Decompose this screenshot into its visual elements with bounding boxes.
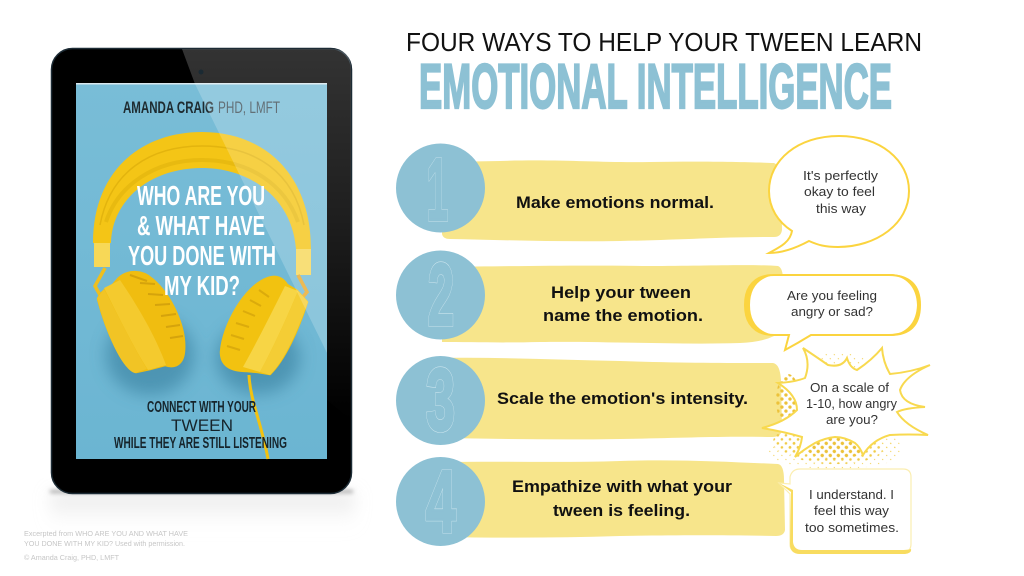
circle number 1 — [396, 144, 485, 232]
numeral 2: 2 — [428, 245, 454, 344]
bubble 4 text — [805, 488, 899, 535]
step text 2: Help your tween — [551, 283, 691, 302]
cable — [249, 375, 268, 459]
burst text: On a scale of — [810, 381, 890, 395]
bubble 1 text: okay to feel — [804, 185, 875, 199]
headband — [93, 132, 311, 249]
credit note: YOU DONE WITH MY KID? Used with permission. — [24, 539, 185, 548]
book subtitle — [114, 399, 287, 452]
numeral 3 — [426, 350, 455, 449]
numeral 3: 3 — [426, 350, 455, 449]
author name: AMANDA CRAIG — [123, 98, 214, 117]
credit note: Excerpted from WHO ARE YOU AND WHAT HAVE — [24, 529, 188, 538]
burst outline — [762, 348, 930, 457]
book title: WHO ARE YOU — [137, 180, 265, 211]
author name: PHD, LMFT — [218, 98, 280, 117]
step text 4: tween is feeling. — [553, 501, 690, 520]
book subtitle: CONNECT WITH YOUR — [147, 399, 256, 416]
halftone dots — [767, 353, 903, 469]
circle number 2 — [396, 250, 485, 340]
burst text — [806, 381, 898, 427]
bubble 1 text: It's perfectly — [803, 169, 879, 183]
headphones — [93, 132, 311, 459]
bubble 2 text: angry or sad? — [791, 305, 873, 319]
numeral 4 — [426, 452, 456, 551]
yellow brush bar 3 — [442, 358, 782, 439]
step 1 — [396, 140, 782, 241]
left earcup — [97, 272, 184, 373]
speech burst 3 — [762, 348, 930, 469]
speech bubble 4 — [779, 469, 911, 554]
credit note — [24, 529, 188, 562]
step 1: 1 — [427, 140, 448, 239]
circle number 3 — [396, 356, 485, 445]
numeral 4: 4 — [426, 452, 456, 551]
earcup shadows — [106, 315, 300, 395]
speech bubble 2 — [744, 274, 921, 350]
step 4 — [396, 452, 785, 551]
bubble 4 text: too sometimes. — [805, 521, 899, 535]
title — [406, 27, 922, 122]
yellow brush bar 2 — [442, 265, 783, 344]
yellow brush bar 4 — [442, 460, 785, 538]
step 1: 1 — [427, 140, 448, 239]
circle number 4 — [396, 457, 485, 546]
step text 3: Scale the emotion's intensity. — [497, 389, 748, 408]
book cover screen — [76, 83, 327, 459]
tablet with book cover — [50, 48, 355, 529]
bubble 2 text: Are you feeling — [787, 289, 877, 303]
numeral 2 — [428, 245, 454, 344]
burst text: 1-10, how angry — [806, 397, 898, 411]
step text 2: name the emotion. — [543, 306, 703, 325]
numeral 4: 4 — [426, 452, 456, 551]
title line 1: FOUR WAYS TO HELP YOUR TWEEN LEARN — [406, 27, 922, 57]
step text 4 — [512, 477, 732, 520]
bubble 1 text: this way — [816, 202, 867, 216]
bubble 4 text: feel this way — [814, 504, 890, 518]
right earcup — [221, 277, 308, 375]
camera — [198, 70, 204, 74]
book subtitle: TWEEN — [171, 416, 233, 435]
numeral 1 — [427, 140, 448, 239]
bubble 1 text — [803, 169, 879, 216]
step text 1: Make emotions normal. — [516, 193, 714, 212]
step 2 — [396, 245, 783, 344]
tablet shadow — [50, 490, 355, 529]
numeral 2: 2 — [428, 245, 454, 344]
tablet body — [52, 48, 352, 494]
book title: & WHAT HAVE — [137, 210, 265, 241]
credit note: © Amanda Craig, PHD, LMFT — [24, 553, 119, 562]
burst text: are you? — [826, 413, 878, 427]
sliders — [94, 243, 110, 267]
bubble 2 text — [787, 289, 877, 319]
step text 4: Empathize with what your — [512, 477, 732, 496]
speech bubble 1 — [769, 136, 909, 253]
book title — [128, 180, 276, 301]
yellow brush bar 1 — [442, 160, 782, 241]
numeral 3: 3 — [426, 350, 455, 449]
step 3 — [396, 350, 782, 449]
book title: YOU DONE WITH — [128, 240, 276, 271]
bezel glare — [182, 49, 351, 420]
book title: MY KID? — [164, 270, 240, 301]
screen glare — [195, 84, 327, 353]
hinges — [95, 268, 105, 295]
book subtitle: WHILE THEY ARE STILL LISTENING — [114, 435, 287, 452]
bubble 4 text: I understand. I — [809, 488, 894, 502]
step text 2 — [543, 283, 703, 325]
